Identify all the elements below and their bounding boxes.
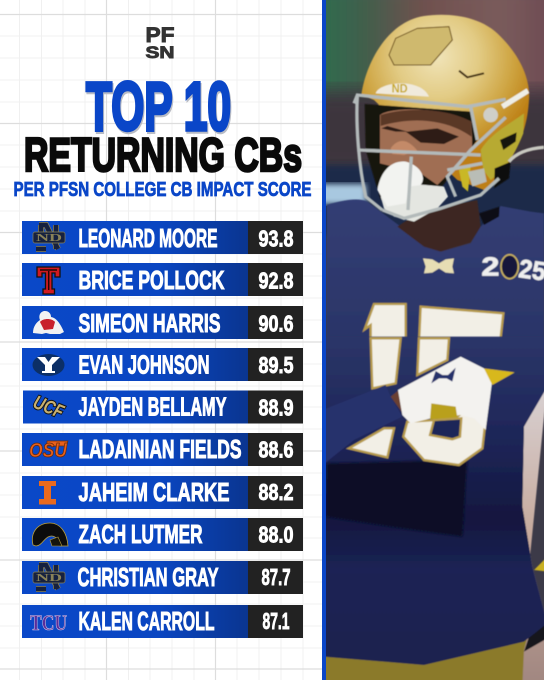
row 6: Ladainian Fields: OSU [29, 440, 67, 462]
subtitle: PER PFSN COLLEGE CB IMPACT SCORE [14, 178, 312, 201]
helmet side vent [500, 132, 517, 150]
row 1: Leonard Moore: 93.8 [258, 226, 294, 252]
jersey lower [324, 337, 544, 665]
deep shadow [327, 460, 467, 537]
mouth guard [377, 161, 423, 207]
helmet vent [459, 71, 484, 77]
row 9: Christian Gray: ND [36, 573, 62, 584]
helmet snap [483, 108, 498, 122]
title: RETURNING CBs: RETURNING CBs [24, 128, 302, 181]
row 5: Jayden Bellamy: UCF [30, 392, 68, 424]
row 4: Evan Johnson [22, 348, 303, 381]
row 3: Simeon Harris: SIMEON HARRIS [78, 308, 220, 338]
pants [324, 627, 530, 680]
title: TOP 10 [86, 68, 232, 147]
row 4: Evan Johnson: 89.5 [258, 352, 294, 378]
lower chin guard [381, 183, 448, 222]
helmet shell [361, 15, 529, 190]
row 1: Leonard Moore: ND [36, 233, 62, 244]
lower body [324, 337, 544, 680]
glove logo [431, 368, 456, 383]
black undershirt [524, 622, 544, 652]
PFSN logo: PF [146, 24, 175, 47]
ranking list [22, 221, 303, 638]
row 1: Leonard Moore: LEONARD MOORE [78, 223, 218, 253]
row 2: Brice Pollock [22, 263, 303, 296]
PFSN logo [146, 24, 175, 62]
row 9: Christian Gray: 87.7 [262, 564, 290, 590]
PFSN logo: SN [146, 43, 174, 62]
upper strap [502, 91, 528, 107]
row 2: Brice Pollock: 92.8 [258, 268, 294, 294]
forehead shade [381, 110, 471, 137]
player photo [306, 0, 544, 680]
glove finger [484, 368, 515, 385]
title: TOP 10: TOP 10 [86, 68, 231, 145]
jersey upper [327, 200, 544, 343]
glove thumb [430, 403, 457, 419]
2025 patch: 2 [481, 251, 499, 281]
row 7: Jaheim Clarke [22, 476, 303, 509]
row 6: Ladainian Fields: 88.6 [258, 436, 294, 462]
neck [397, 200, 481, 252]
collar patch [479, 207, 500, 225]
row 10: Kalen Carroll: 87.1 [262, 608, 290, 634]
title: TOP 10: TOP 10 [87, 70, 232, 147]
2025 patch [481, 253, 544, 282]
row 3: Simeon Harris [22, 306, 303, 339]
number 15 lower [349, 338, 489, 465]
row 6: Ladainian Fields: LADAINIAN FIELDS [78, 434, 242, 464]
jaw snap [468, 168, 487, 187]
eyes and nose shadow [381, 126, 459, 144]
jaw pad [459, 167, 471, 192]
blue divider [322, 0, 326, 680]
row 8: Zach Lutmer: ZACH LUTMER [78, 519, 203, 549]
row 7: Jaheim Clarke: JAHEIM CLARKE [78, 477, 230, 507]
number 15 upper [365, 304, 503, 343]
row 5: Jayden Bellamy: 88.9 [258, 394, 294, 420]
helmet logo: ND [392, 81, 408, 95]
face [380, 109, 472, 185]
sleeve [324, 385, 402, 464]
helmet side plate [481, 113, 524, 180]
row 4: Evan Johnson: EVAN JOHNSON [78, 350, 210, 380]
blurred stadium background [326, 0, 544, 614]
chin cup [494, 162, 511, 188]
wristband [534, 557, 544, 572]
number hole [430, 418, 461, 439]
row 3: Simeon Harris: 90.6 [258, 310, 294, 336]
chin strap [509, 147, 544, 162]
row 7: Jaheim Clarke: 88.2 [258, 479, 294, 505]
background grid [0, 0, 326, 680]
row 6: Ladainian Fields [22, 433, 303, 466]
glove [398, 357, 492, 430]
row 2: Brice Pollock: BRICE POLLOCK [78, 265, 225, 295]
wrist [390, 390, 402, 412]
row 8: Zach Lutmer: 88.0 [258, 522, 294, 548]
pale background right [521, 383, 544, 680]
row 8: Zach Lutmer [22, 518, 303, 551]
row 10: Kalen Carroll: KALEN CARROLL [78, 606, 215, 636]
row 10: Kalen Carroll: TCU [30, 610, 67, 635]
row 9: Christian Gray: CHRISTIAN GRAY [78, 562, 218, 592]
helmet crown panel [389, 27, 452, 65]
forehead pad [376, 83, 429, 97]
under armour chest logo [423, 258, 454, 273]
row 5: Jayden Bellamy: JAYDEN BELLAMY [78, 392, 226, 422]
nose highlight [391, 141, 417, 155]
upper body and helmet [327, 15, 544, 343]
face opening shadow [365, 104, 477, 200]
face mask [354, 95, 506, 218]
